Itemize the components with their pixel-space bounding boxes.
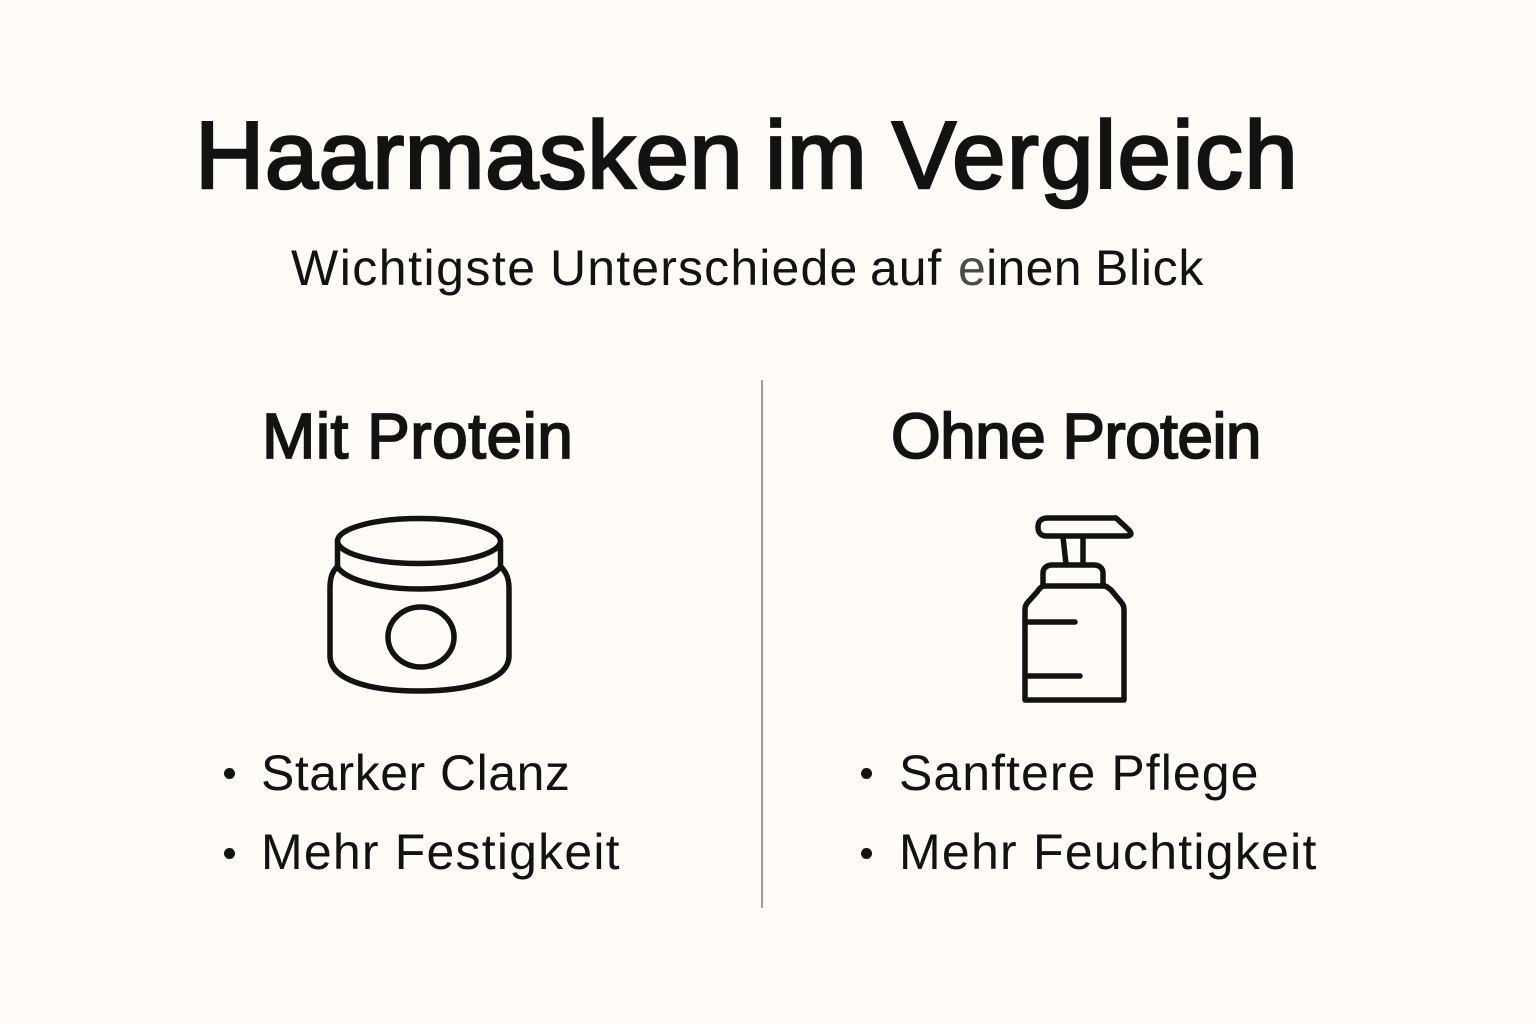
title: Vergleich [892,102,1299,209]
bullet list: ohne protein [861,745,1318,880]
bullet: starker glanz: Starker Clanz [261,745,570,801]
bullet dot [860,768,872,778]
panel: mit protein [224,400,621,880]
bullet dot [860,848,872,858]
bullet: mehr festigkeit: Mehr Festigkeit [261,824,621,880]
title: im [765,102,867,209]
subtitle: Unterschiede [550,240,858,296]
subtitle [291,240,1204,296]
bullet dot [224,848,234,858]
icon: jar [327,516,512,694]
icon: pump bottle [1022,515,1134,703]
subtitle: auf [870,240,942,296]
subtitle: Wichtigste [291,240,537,296]
subtitle: Blick [1095,240,1204,296]
center divider [761,380,763,908]
bullet dot [224,768,234,778]
bullet: mehr feuchtigkeit: Mehr Feuchtigkeit [899,824,1318,880]
panel: ohne protein [861,400,1318,880]
title [195,102,1299,210]
subtitle: einen [958,240,1082,296]
bullet list: mit protein [224,745,621,880]
bullet: sanftere pflege: Sanftere Pflege [899,745,1259,801]
heading: ohne protein: Ohne Protein [891,400,1261,472]
heading: mit protein: Mit Protein [262,400,573,472]
title: Haarmasken [195,102,743,209]
